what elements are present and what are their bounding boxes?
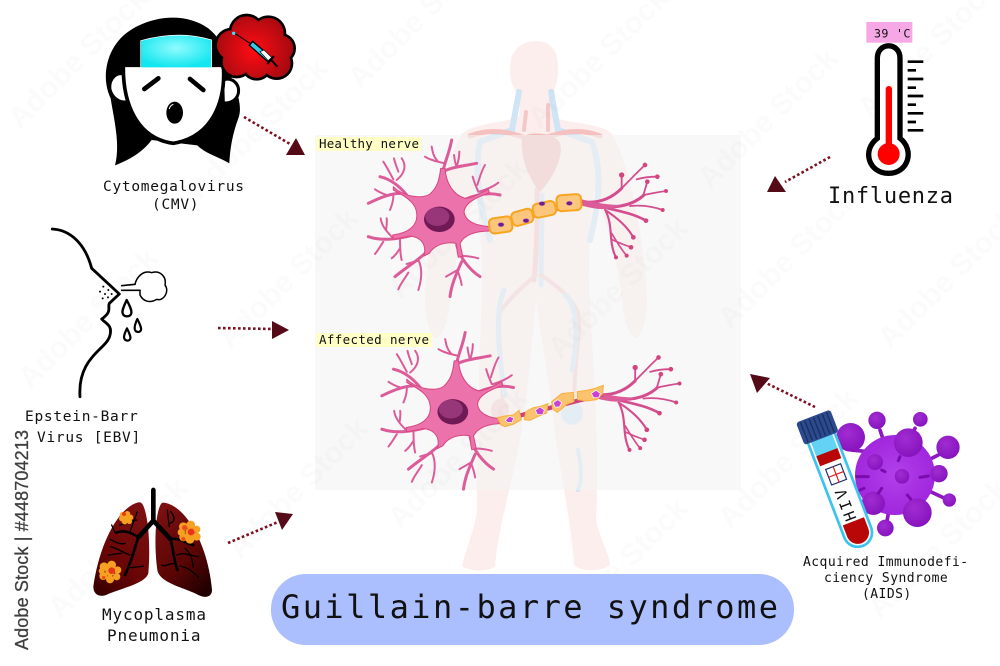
mouth: [166, 102, 183, 124]
arrow: influenza to nerves: [767, 157, 830, 192]
label: cytomegalovirus: Cytomegalovirus: [103, 179, 245, 195]
icon: infected lungs: [93, 490, 212, 597]
hair: [106, 18, 240, 165]
diagram: affected neuron: [382, 332, 681, 489]
label: affected nerve: Affected nerve: [319, 332, 429, 347]
ears: [110, 74, 127, 102]
label: healthy nerve: Healthy nerve: [319, 136, 419, 151]
airways: [108, 490, 198, 577]
virus: [836, 412, 960, 536]
title banner: [271, 574, 794, 645]
arrow: EBV to nerves: [218, 321, 289, 339]
infection cluster: [99, 511, 201, 583]
test label: [820, 458, 864, 525]
icon: EBV profile with nose drops: [52, 229, 167, 397]
label: Epstein-Barr virus: Epstein-Barr: [25, 409, 138, 425]
label: influenza: Influenza: [828, 184, 954, 209]
virus cloud: [214, 14, 296, 81]
label: mycoplasma pneumonia: Pneumonia: [107, 626, 201, 645]
title banner: Guillain-barre syndrome: [281, 588, 780, 626]
test tube: [796, 410, 880, 554]
temperature tag: 39 'C: [874, 26, 911, 40]
icon: HIV virus and blood test tube: [796, 410, 960, 554]
illustration: faded human body with blood vessels: [425, 41, 647, 570]
label: AIDS: (AIDS): [862, 587, 912, 602]
icon: thermometer: [866, 22, 923, 173]
axon myelin sheaths: [488, 194, 583, 234]
icon: patient with cold pack and cytomegalovirus cloud: [106, 14, 296, 165]
eyes: [144, 78, 203, 90]
arrow: CMV to nerves: [244, 117, 305, 155]
diagram: healthy neuron: [368, 140, 668, 297]
stock image credit: Adobe Stock | #448704213: [12, 430, 32, 650]
cold pack: [141, 35, 212, 68]
syringe: [232, 32, 277, 67]
panel: central nerve backdrop: [315, 135, 741, 490]
face: [123, 65, 224, 143]
label: cytomegalovirus: (CMV): [152, 197, 199, 213]
label: AIDS: Acquired Immunodefi-: [803, 555, 969, 570]
arrow: lungs to nerves: [228, 512, 293, 543]
label: mycoplasma pneumonia: Mycoplasma: [102, 605, 207, 624]
damaged axon: [497, 385, 603, 427]
temperature tag: [866, 22, 912, 43]
label: AIDS: ciency Syndrome: [824, 571, 948, 586]
label: Epstein-Barr virus: Virus [EBV]: [37, 430, 141, 446]
test label: HIV: [831, 484, 860, 524]
arrow: AIDS to nerves: [750, 374, 815, 407]
